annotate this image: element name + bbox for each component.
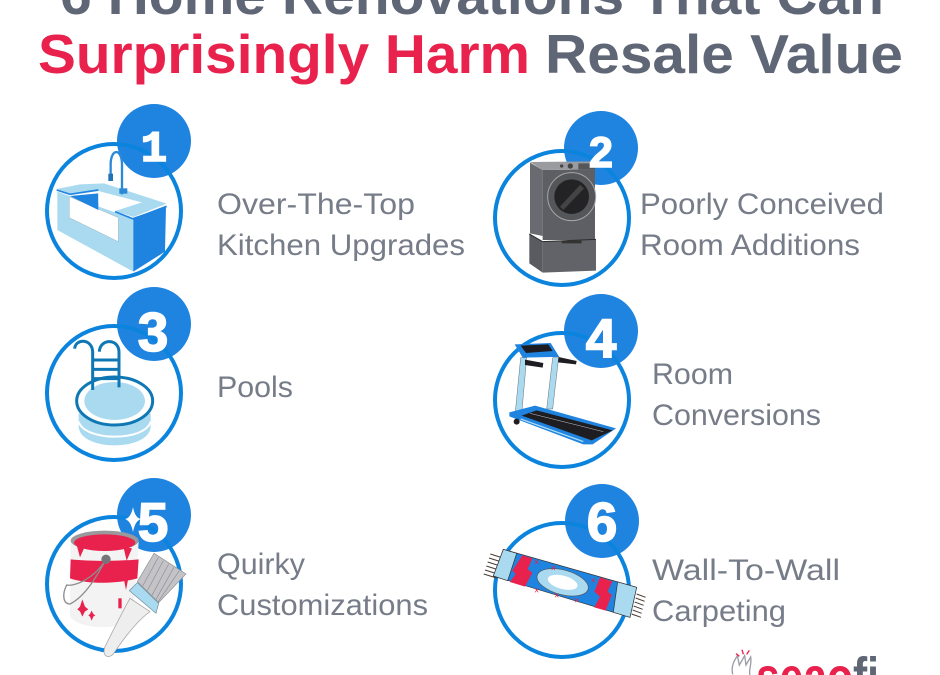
number badge 4 <box>564 294 638 368</box>
ring 1 <box>47 144 181 278</box>
logo <box>732 647 879 675</box>
label 1 <box>217 188 465 262</box>
panel: item 5 quirky customizations <box>47 478 428 657</box>
label 1: Kitchen Upgrades <box>217 229 465 262</box>
icon: kitchen sink <box>57 152 167 272</box>
icon: washing machine <box>529 161 596 273</box>
number badge 3 <box>117 287 191 361</box>
number 3: 3 <box>138 301 168 363</box>
panel: item 4 room conversions <box>495 294 821 467</box>
label 4: Conversions <box>652 399 821 432</box>
label 2: Room Additions <box>640 229 860 262</box>
label 2 <box>640 188 884 262</box>
label 4 <box>652 358 821 432</box>
label 3: Pools <box>217 371 293 404</box>
panel: item 6 wall-to-wall carpeting <box>484 484 840 657</box>
icon: carpet <box>484 549 646 617</box>
ring 2 <box>495 151 629 285</box>
ring 3 <box>47 326 181 460</box>
label 2: Poorly Conceived <box>640 188 884 221</box>
label 5 <box>217 548 428 622</box>
number 6: 6 <box>587 491 617 553</box>
icon: sparkle <box>125 507 141 532</box>
label 6: Carpeting <box>652 595 786 628</box>
number badge 2 <box>564 111 638 185</box>
label 5: Quirky <box>217 548 305 581</box>
number badge 1 <box>117 104 191 178</box>
icon: logo hand with sparks <box>732 650 751 675</box>
panel: item 1 kitchen upgrades <box>47 104 465 278</box>
number 2: 2 <box>589 129 613 177</box>
label 4: Room <box>652 358 733 391</box>
number badge 5 <box>117 478 191 552</box>
panel: item 2 room additions <box>495 111 884 285</box>
icon: treadmill <box>509 343 616 444</box>
number 4: 4 <box>586 307 617 369</box>
title: Resale Value <box>545 23 903 85</box>
ring 4 <box>495 333 629 467</box>
title: Surprisingly Harm <box>38 23 530 85</box>
label 5: Customizations <box>217 589 428 622</box>
number 1: 1 <box>141 125 167 175</box>
icon: paint can and brush <box>64 531 186 657</box>
label 6 <box>652 554 840 628</box>
panel: item 3 pools <box>47 287 293 460</box>
number badge 6 <box>565 484 639 558</box>
number 5: 5 <box>138 491 168 553</box>
ring 6 <box>495 523 629 657</box>
label 1: Over-The-Top <box>217 188 415 221</box>
icon: pool <box>75 341 153 445</box>
label 6: Wall-To-Wall <box>652 554 840 587</box>
title <box>38 0 903 85</box>
ring 5 <box>47 517 181 651</box>
